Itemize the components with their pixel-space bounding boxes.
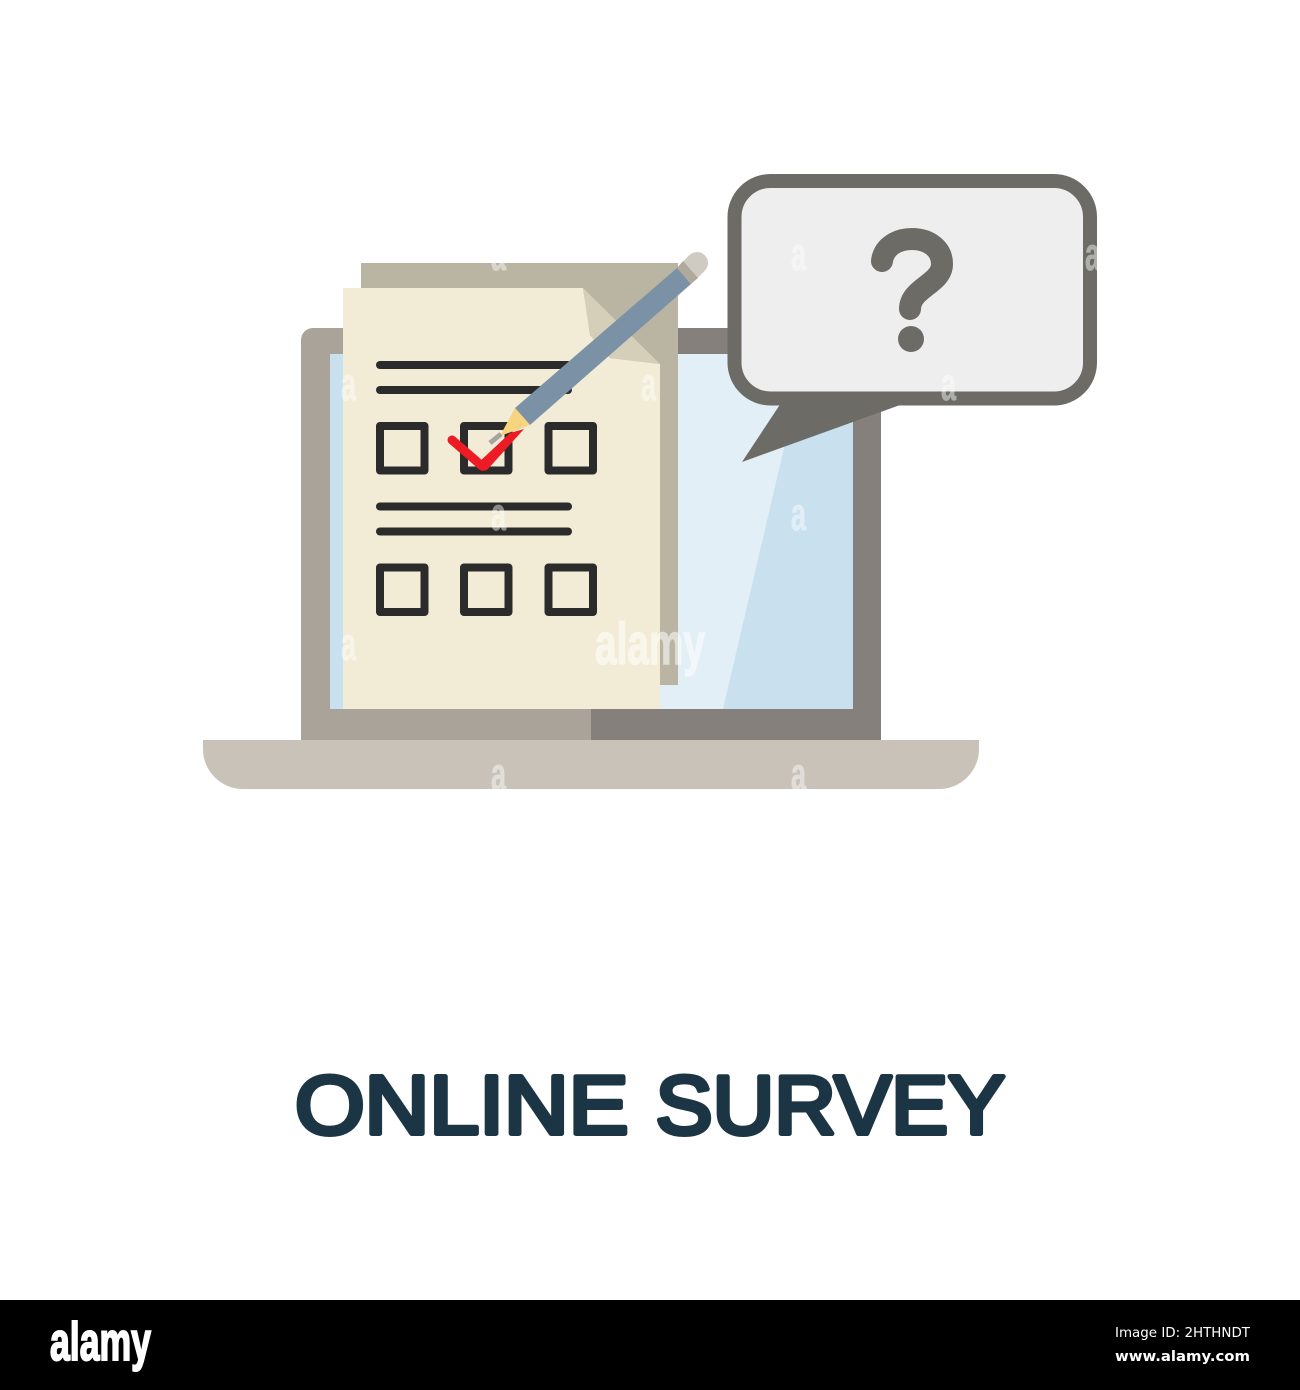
- watermark letters: a: [941, 358, 956, 410]
- pencil eraser: [690, 263, 697, 270]
- watermark letters: a: [341, 618, 356, 670]
- website: www.alamy.com: [1115, 1348, 1250, 1365]
- watermark logo: alamy: [595, 612, 705, 677]
- watermark letters: a: [641, 358, 656, 410]
- pencil tip: [500, 408, 530, 436]
- back sheet: [361, 263, 678, 685]
- watermark letters: a: [791, 748, 806, 800]
- icon: pencil: [490, 261, 698, 443]
- watermark letters: a: [491, 228, 506, 280]
- icon: survey document: [343, 263, 678, 709]
- red check mark: [452, 429, 524, 471]
- pencil ferrule: [677, 261, 698, 284]
- question text lines bottom: [380, 506, 568, 532]
- question mark: [882, 239, 942, 352]
- title: ONLINE: [295, 1058, 628, 1152]
- checkboxes bottom row: [380, 568, 593, 612]
- laptop lid right half: [591, 328, 881, 740]
- laptop base: [203, 740, 979, 789]
- watermark letters: a: [791, 228, 806, 280]
- icon: laptop: [203, 328, 979, 789]
- bubble body: [734, 181, 1090, 398]
- footer bar: [0, 1300, 1300, 1390]
- laptop screen: [330, 354, 853, 709]
- pencil body: [515, 268, 691, 425]
- watermark letters: a: [791, 488, 806, 540]
- question text lines top: [380, 365, 568, 390]
- bubble tail: [742, 392, 900, 462]
- speech bubble with question mark: [734, 181, 1090, 462]
- pencil lead: [490, 434, 501, 443]
- title: SURVEY: [656, 1058, 1005, 1152]
- footer logo: alamy: [50, 1312, 151, 1372]
- front sheet: [343, 288, 660, 709]
- folded corner: [583, 288, 660, 364]
- watermark letters: [341, 228, 1100, 800]
- watermark letters: a: [491, 748, 506, 800]
- screen glare: [344, 354, 806, 709]
- title: [295, 1058, 1005, 1152]
- laptop lid left half: [301, 328, 591, 740]
- checkboxes top row: [380, 426, 593, 470]
- watermark letters: a: [341, 358, 356, 410]
- watermark letters: a: [1085, 228, 1100, 280]
- watermark letters: a: [491, 488, 506, 540]
- image id: Image ID: 2HTHNDT: [1115, 1326, 1251, 1341]
